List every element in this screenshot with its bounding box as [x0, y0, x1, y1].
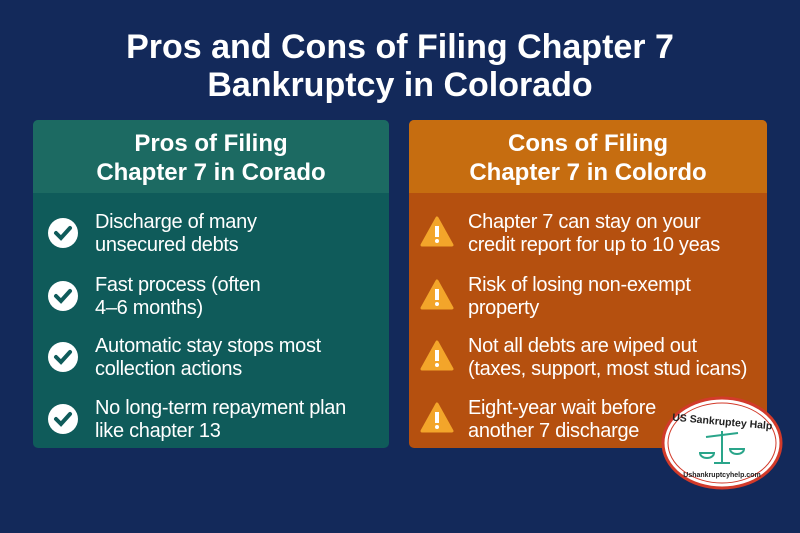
con item 2: property	[468, 297, 539, 319]
pro item 2: 4–6 months)	[95, 297, 203, 319]
con item 2	[420, 274, 691, 319]
pro item 1: Discharge of many	[95, 211, 257, 233]
con item 4: another 7 discharge	[468, 420, 639, 442]
con item 1	[420, 211, 720, 256]
con item 1: Chapter 7 can stay on your	[468, 211, 700, 233]
con item 2: Risk of losing non-exempt	[468, 274, 691, 296]
pro item 1	[48, 211, 257, 256]
panel: cons	[409, 120, 767, 448]
title: Pros and Cons of Filing Chapter 7	[126, 28, 674, 66]
con item 3: (taxes, support, most stud icans)	[468, 358, 747, 380]
pro item 3: Automatic stay stops most	[95, 335, 321, 357]
title: Bankruptcy in Colorado	[207, 66, 593, 104]
con item 4	[420, 397, 656, 442]
pro item 4: like chapter 13	[95, 420, 221, 442]
cons heading: Chapter 7 in Colordo	[469, 159, 707, 186]
pros heading: Pros of Filing	[134, 130, 288, 157]
con item 4: Eight-year wait before	[468, 397, 656, 419]
panel: pros	[33, 120, 389, 448]
con item 3	[420, 335, 747, 380]
pro item 2	[48, 274, 260, 319]
pro item 2: Fast process (often	[95, 274, 260, 296]
logo badge: US Sankruptey Halp	[672, 412, 773, 432]
con item 3: Not all debts are wiped out	[468, 335, 697, 357]
pro item 3: collection actions	[95, 358, 242, 380]
con item 1: credit report for up to 10 yeas	[468, 234, 720, 256]
pro item 1: unsecured debts	[95, 234, 238, 256]
cons heading	[409, 120, 767, 193]
logo badge: Ushankruptcyhelp.com	[683, 472, 761, 479]
cons heading: Cons of Filing	[508, 130, 668, 157]
pro item 4	[48, 397, 346, 442]
logo badge	[662, 396, 782, 490]
pro item 3	[48, 335, 322, 380]
pro item 4: No long-term repayment plan	[95, 397, 346, 419]
title	[126, 28, 674, 104]
pros heading	[33, 120, 389, 193]
pros heading: Chapter 7 in Corado	[96, 159, 326, 186]
